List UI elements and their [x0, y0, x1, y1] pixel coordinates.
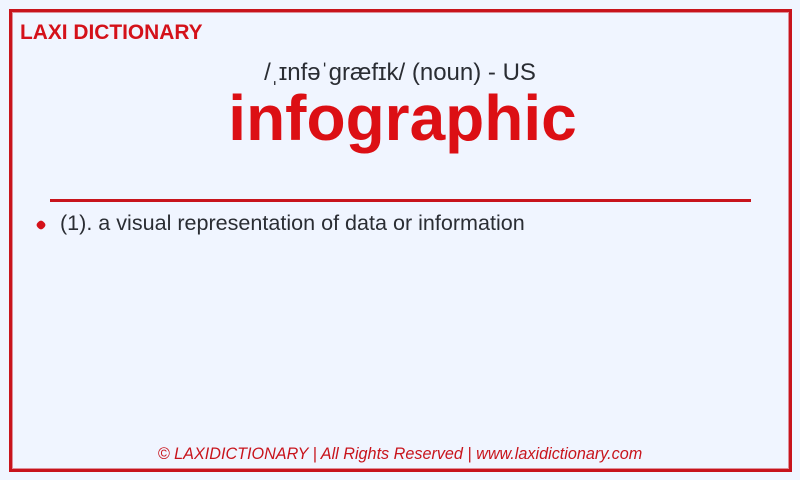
brand heading: LAXI DICTIONARY — [20, 21, 203, 44]
definition text: (1). a visual representation of data or information — [60, 210, 525, 235]
bullet icon — [35, 219, 47, 231]
pronunciation line: /ˌɪnfəˈɡræfɪk/ (noun) - US — [264, 59, 536, 86]
footer copyright: © LAXIDICTIONARY | All Rights Reserved | www.laxidictionary.com — [158, 445, 642, 463]
title: infographic: infographic — [228, 82, 577, 154]
divider — [50, 199, 751, 202]
